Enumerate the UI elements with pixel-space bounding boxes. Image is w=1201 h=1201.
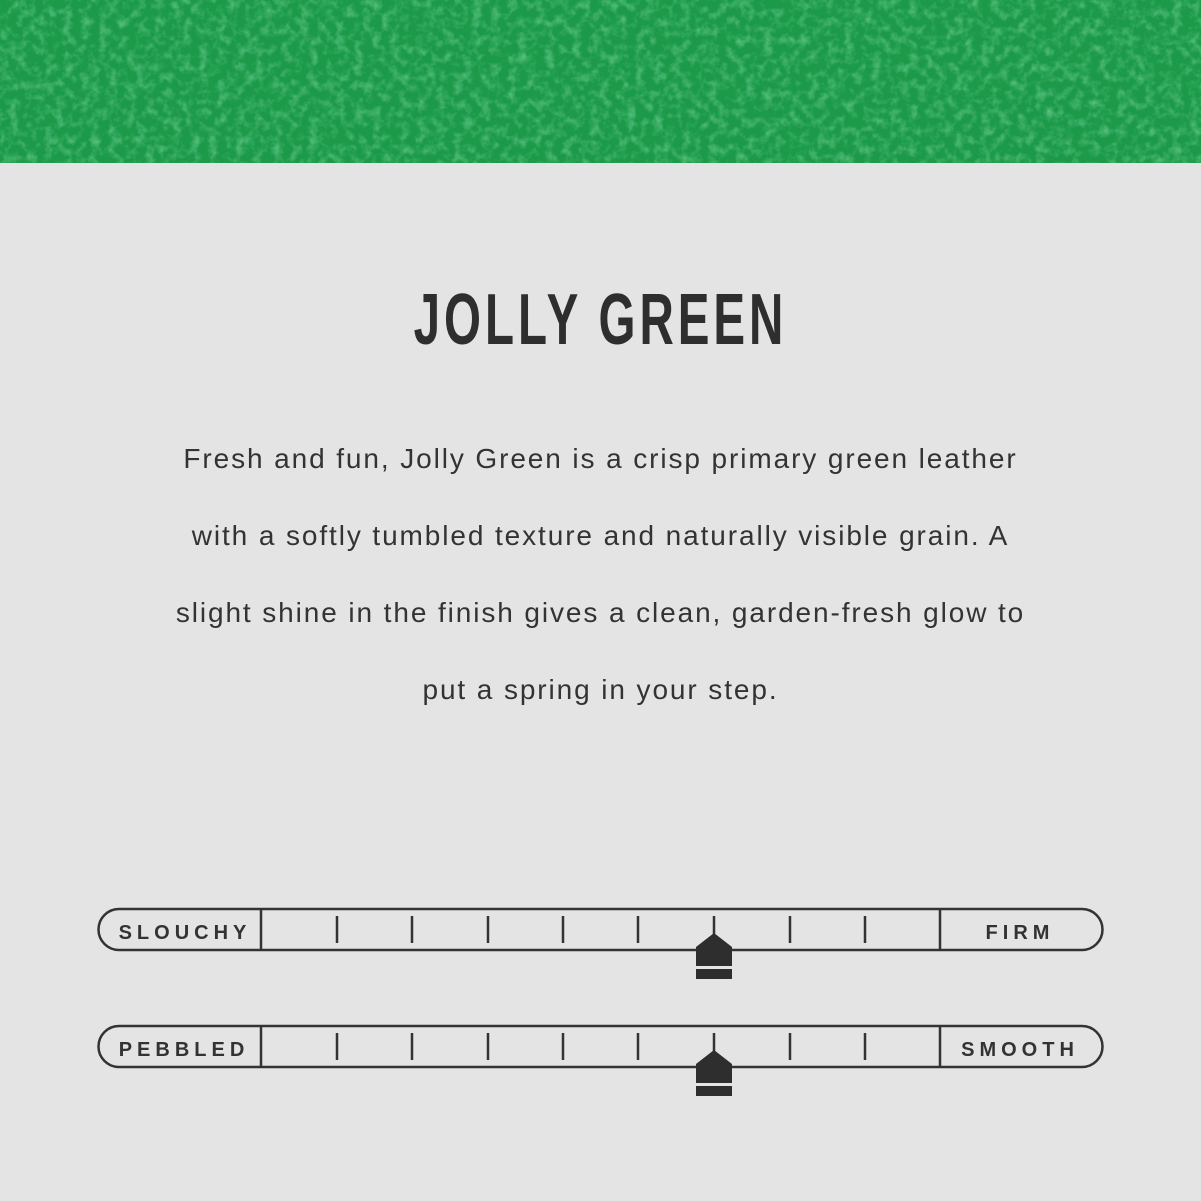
description text: with a softly tumbled texture and naturally visible grain. A (192, 520, 1009, 551)
scale: pebbled to smooth (98, 1026, 1102, 1096)
marker (696, 933, 732, 979)
description text: slight shine in the finish gives a clean, garden-fresh glow to (176, 597, 1025, 628)
title: JOLLY GREEN (414, 280, 787, 360)
scale: slouchy to firm: FIRM (986, 922, 1054, 944)
marker (696, 1050, 732, 1096)
scale: slouchy to firm (98, 909, 1102, 979)
scale: pebbled to smooth: SMOOTH (961, 1039, 1079, 1061)
description text: put a spring in your step. (422, 674, 779, 705)
description text (176, 443, 1025, 705)
scale: pebbled to smooth: PEBBLED (119, 1039, 249, 1061)
leather texture banner (0, 0, 1201, 163)
scale: slouchy to firm: SLOUCHY (119, 922, 251, 944)
description text: Fresh and fun, Jolly Green is a crisp primary green leather (183, 443, 1018, 474)
